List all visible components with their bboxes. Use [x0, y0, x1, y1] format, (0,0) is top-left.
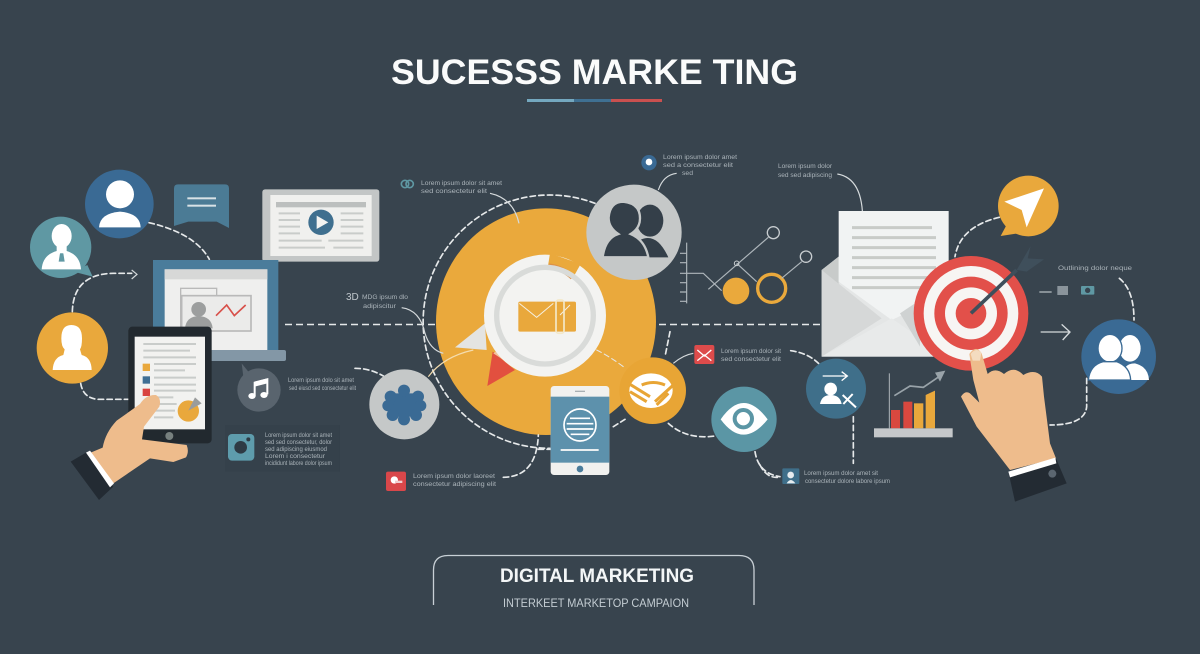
- hand holding tablet: [71, 395, 188, 500]
- icon: blue dot: [641, 155, 657, 170]
- connector: left dashed paths: [72, 223, 209, 399]
- footer heading: DIGITAL MARKETING: [500, 566, 694, 587]
- text: centre captions: sed consectetur elit: [421, 188, 487, 195]
- text: right captions: Lorem ipsum dolor amet sit: [804, 470, 878, 477]
- icon: blue user circle: [85, 170, 154, 238]
- laptop: [153, 260, 286, 361]
- icon: blue people circle: [1081, 319, 1156, 394]
- icon: people circle: [586, 185, 682, 280]
- bar chart: [874, 371, 953, 437]
- video card: [262, 189, 379, 262]
- icon: teal link: [401, 180, 413, 188]
- text: right captions: sed sed adipiscing: [778, 172, 832, 179]
- text: centre captions: Lorem ipsum dolor sit amet: [421, 180, 502, 187]
- panel: instagram note: [225, 425, 340, 472]
- text: right captions: Lorem ipsum dolor: [778, 163, 833, 170]
- icon: smartphone: [551, 386, 609, 475]
- dashed orbit: [423, 195, 595, 448]
- text: centre captions: [346, 154, 737, 488]
- connectors: right dashed paths: [760, 174, 1134, 477]
- envelope with letter: [822, 211, 949, 357]
- icon: arrow: [1041, 324, 1070, 340]
- text: centre captions: sed: [682, 170, 693, 177]
- icon: red search: [386, 472, 406, 491]
- icon: speech bubble: [174, 184, 229, 228]
- text: centre captions: MDG ipsum dlo: [362, 294, 408, 301]
- connectors: hub leader lines: [355, 173, 780, 477]
- icon: target with arrow: [914, 246, 1044, 371]
- line chart: [680, 227, 812, 304]
- panel: left audience and devices: [30, 170, 379, 500]
- text: right captions: sed consectetur elit: [721, 356, 781, 363]
- icon: photo badge: [782, 468, 799, 484]
- icon: teal businessman circle: [30, 217, 93, 278]
- icon: user with arrow: [806, 359, 866, 419]
- text: left captions: sed sed consectetur, dolor: [265, 439, 333, 446]
- title: SUCESSS MARKE TING: [391, 53, 798, 92]
- text: left captions: Lorem ipsum dolo sit amet: [288, 377, 354, 384]
- text: centre captions: 3D: [346, 292, 359, 303]
- icons: small social marks: [1039, 286, 1094, 295]
- text: left captions: Lorem ipsum dolor sit amet: [265, 432, 332, 439]
- icon: puzzle gear: [369, 369, 439, 439]
- icon: paper plane bubble: [998, 176, 1059, 236]
- footer subheading: INTERKEET MARKETOP CAMPAION: [503, 596, 689, 610]
- panel: right target and analytics: [760, 174, 1156, 502]
- icon: yellow user circle: [37, 312, 108, 384]
- panel: central email hub: [355, 155, 812, 491]
- tablet: [128, 327, 212, 443]
- text: left captions: sed adipiscing eiusmod: [265, 446, 327, 453]
- icon: music note: [237, 363, 281, 412]
- icon: red mail: [694, 345, 714, 364]
- text: left captions: incididunt labore dolor ipsum: [265, 460, 332, 467]
- icon: handshake: [619, 357, 686, 424]
- icon: eye: [711, 387, 777, 452]
- text: right captions: [721, 163, 1132, 485]
- text: left captions: sed eiusd sed consectetur elit: [289, 385, 356, 392]
- text: left captions: Lorem i consectetur: [265, 453, 326, 460]
- text: right captions: Lorem ipsum dolor sit: [721, 348, 781, 355]
- big yellow circle: [436, 208, 656, 435]
- central dashed axis: [285, 324, 825, 326]
- hand pointing at target: [961, 349, 1067, 502]
- text: centre captions: adipiscitur: [363, 303, 397, 310]
- text: centre captions: consectetur adipiscing elit: [413, 481, 496, 488]
- text: right captions: Outlining dolor neque: [1058, 265, 1132, 272]
- footer panel: [434, 556, 754, 610]
- icon: email ring: [455, 253, 606, 386]
- text: centre captions: Lorem ipsum dolor amet: [663, 154, 737, 161]
- text: left captions: [265, 377, 356, 467]
- text: centre captions: Lorem ipsum dolor laoreet: [413, 473, 495, 480]
- text: right captions: consectetur dolore labore ipsum: [805, 478, 890, 485]
- text: centre captions: sed a consectetur elit: [663, 162, 733, 169]
